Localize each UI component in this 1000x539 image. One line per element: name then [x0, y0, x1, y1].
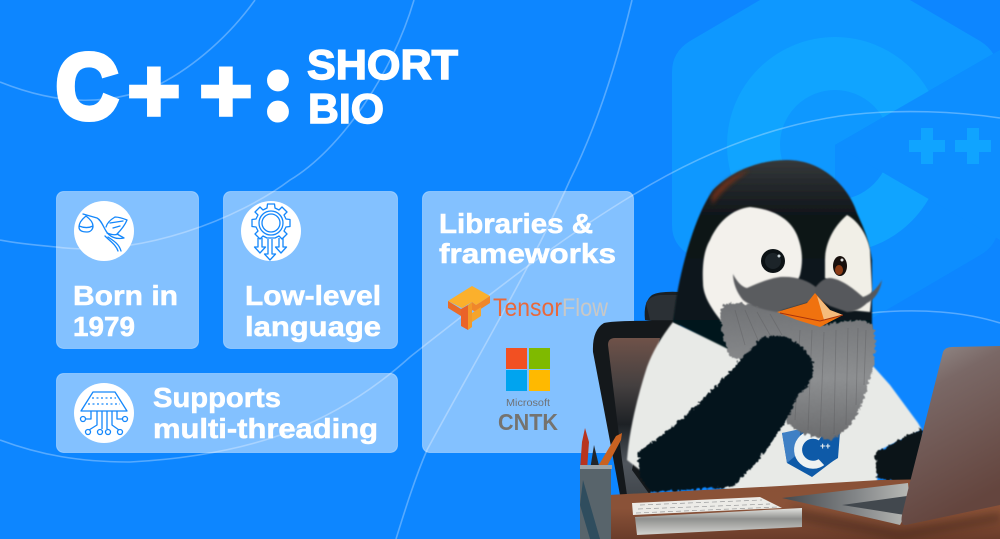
panel: low-level language	[224, 192, 398, 348]
illustration: penguin at desk	[580, 160, 1000, 539]
far arm	[875, 428, 925, 484]
shirt logo	[782, 429, 840, 477]
text: low-level language: Low-level	[245, 280, 381, 311]
keyboard	[632, 497, 802, 535]
title: C++:	[56, 32, 295, 142]
heading: libraries and frameworks: frameworks	[439, 238, 616, 269]
logo: TensorFlow: Tensor	[493, 294, 562, 322]
text: low-level language: language	[245, 311, 381, 342]
icon: processor chip with circuit lines	[74, 383, 134, 443]
t-shirt	[627, 322, 922, 490]
panel: born in 1979	[56, 192, 198, 348]
title	[56, 32, 458, 142]
logo: Microsoft CNTK: CNTK	[498, 409, 558, 435]
title: short bio	[307, 41, 458, 132]
title: C++:: +	[127, 40, 181, 142]
text: born in 1979: 1979	[73, 311, 135, 342]
title: C++:: C	[56, 36, 118, 138]
beak	[777, 293, 843, 327]
flipper	[638, 336, 813, 492]
text: born in 1979	[73, 280, 178, 342]
logo: Microsoft CNTK: Microsoft	[506, 397, 550, 409]
shirt logo: ++	[820, 441, 831, 451]
text: supports multi-threading: Supports	[153, 382, 281, 413]
logo: Microsoft CNTK	[498, 348, 558, 435]
heading: libraries and frameworks: Libraries &	[439, 208, 593, 239]
text: supports multi-threading	[153, 382, 378, 444]
logo: TensorFlow: Flow	[562, 294, 609, 322]
logo: TensorFlow	[448, 286, 609, 330]
eyes	[761, 249, 847, 276]
heading: libraries and frameworks	[439, 208, 616, 269]
title: C++:: :	[262, 32, 295, 140]
head	[673, 160, 872, 350]
watermark: C++ hexagon logo	[672, 0, 1000, 340]
icon: gear with down arrows	[241, 201, 301, 261]
panel: supports multi-threading	[56, 374, 398, 452]
panel: libraries and frameworks	[422, 192, 634, 452]
laptop	[782, 346, 1000, 525]
moustache	[733, 274, 882, 312]
title: short bio: BIO	[308, 85, 384, 132]
desk	[580, 478, 1000, 539]
title: short bio: SHORT	[307, 41, 458, 88]
text: low-level language	[245, 280, 381, 342]
office chair	[593, 292, 680, 495]
head highlight	[712, 170, 750, 205]
text: born in 1979: Born in	[73, 280, 178, 311]
pencil holder	[580, 428, 622, 539]
beard	[721, 303, 875, 440]
icon: stork carrying bundle	[74, 201, 134, 261]
title: C++:: +	[199, 40, 253, 142]
text: supports multi-threading: multi-threading	[153, 413, 378, 444]
face white patches	[703, 207, 872, 325]
